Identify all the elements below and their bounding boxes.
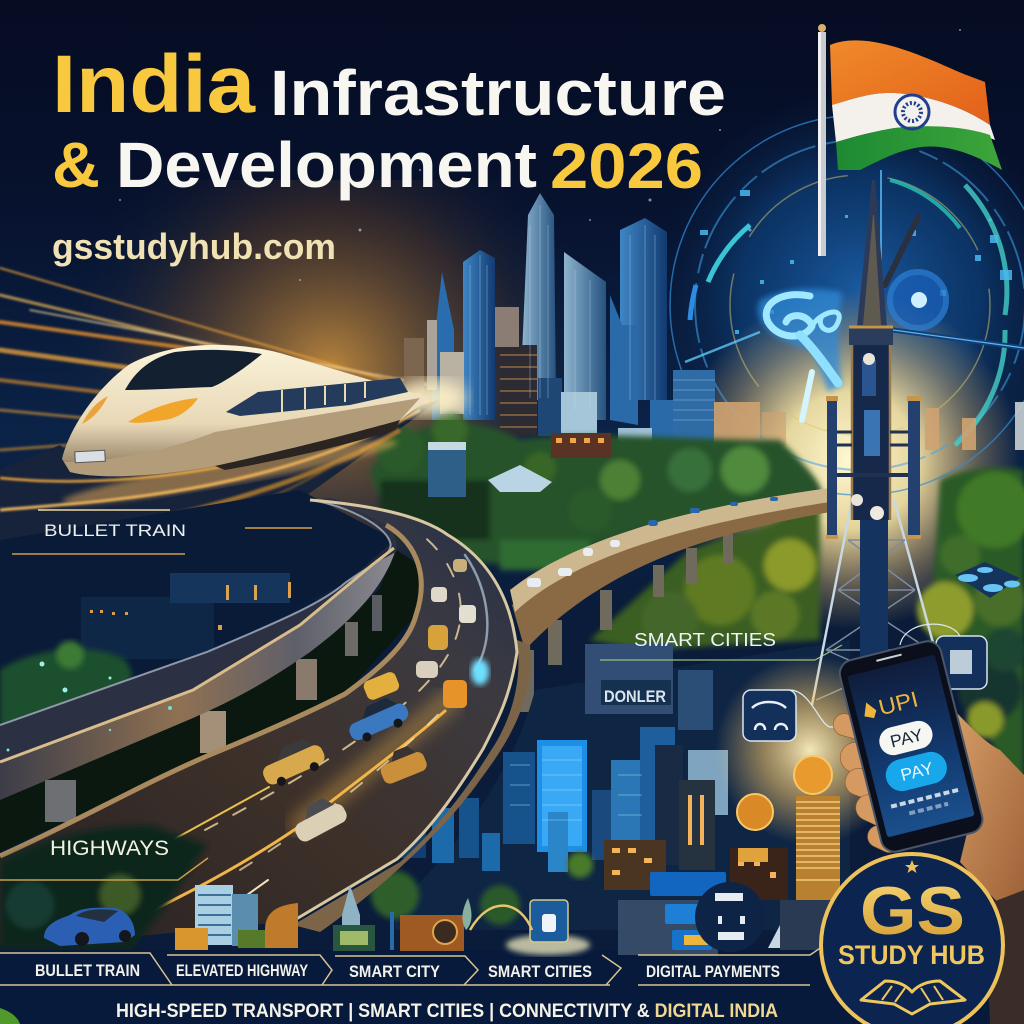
corner accent: green arc [0,1008,20,1024]
website: gsstudyhub.com [52,226,336,267]
tagline: HIGH-SPEED TRANSPORT | SMART CITIES | CONNECTIVITY & DIGITAL INDIA [116,1001,778,1022]
track light lines [0,400,430,575]
warm distant skyline [714,402,1024,450]
badge: GS letters: GS [860,873,965,949]
label: highways: HIGHWAYS [50,837,169,860]
overpass side wall [0,548,395,800]
side antenna columns [827,397,837,538]
title: Development [116,129,537,201]
flag green band [836,126,1002,170]
bottom illustrated strip [0,872,1024,1024]
text: UPI: UPI [876,686,921,720]
sign: DONLER: DONLER [604,687,666,706]
cars on highway [256,559,476,844]
badge: study hub: STUDY HUB [838,940,985,970]
icon: link tile [743,690,835,741]
train track embankment [0,400,440,590]
gold coin tower [737,756,840,900]
forest canopy behind city [370,412,823,570]
hand palm [947,703,1024,905]
hand holding phone [831,638,1024,905]
right forest masses [590,468,1024,810]
flag white band [832,93,995,142]
car: gold sedan [256,734,329,791]
title line one: India [52,39,256,130]
speed light streaks behind train [0,268,430,450]
icon: chip tile [900,624,987,689]
sunrise glow behind tower [660,280,1024,640]
antenna mast [880,170,882,260]
bullet train [60,345,466,513]
road label: bullet train: BULLET TRAIN [44,521,186,540]
lower lattice legs [812,500,950,705]
icon: ashoka chakra [895,95,929,129]
car: amber sedan [375,742,429,786]
car: white sedan [287,792,349,844]
flag saffron band [830,40,990,125]
telecom tower [812,170,950,705]
floating ui tile: top right [955,562,1020,598]
left night district [0,490,395,730]
icon: smart city block [333,885,472,951]
far skyline with towers [404,193,715,462]
title [52,39,726,267]
road outer wall [293,640,530,932]
button: white pay [876,718,935,758]
nav label: smart city: SMART CITY [349,962,441,981]
green forest at road foot [0,825,207,950]
button: blue pay: PAY [899,759,935,785]
label: smart cities: SMART CITIES [634,630,776,650]
right elevated overpass [510,488,830,712]
badge: GS Study Hub [821,854,1024,1024]
indian flag on pole [818,24,1002,256]
icon: glass building [175,885,298,950]
nav label: smart cities: SMART CITIES [488,962,592,981]
elevated overpass left [0,498,397,822]
nav label: digital payments: DIGITAL PAYMENTS [646,962,780,981]
overpass deck [0,498,397,762]
icon: digital payment cluster [618,872,840,955]
nav label: bullet train: BULLET TRAIN [35,961,140,980]
nav bar: five chevron labels [0,938,835,985]
lower city skyline [371,640,850,930]
button: blue pay [882,748,950,794]
title: Infrastructure [270,57,726,129]
title line two: & [52,129,100,201]
phone [837,638,985,855]
mid building and waterfront block [428,433,611,497]
icon: glowing G S hologram symbol [758,289,842,420]
car: blue sedan [343,692,413,747]
main highway road surface [0,500,530,945]
glow behind coin tower [710,650,900,850]
title: 2026 [550,130,703,202]
icon: blue car [44,908,135,946]
panel: holographic connectivity rings [670,115,1024,495]
badge star [905,860,919,873]
button: white pay: PAY [888,725,925,752]
icon: lock card on platform [470,900,590,955]
label: highways [0,837,208,880]
dark ground under overpass [0,549,421,852]
label: smart cities [600,630,842,660]
fingers [831,711,904,856]
beam right [893,330,1024,348]
district building [81,573,291,659]
spire [857,180,887,327]
central shaft [852,345,890,520]
icon: open book [861,981,965,1014]
nav label: elevated highway: ELEVATED HIGHWAY [176,961,309,980]
